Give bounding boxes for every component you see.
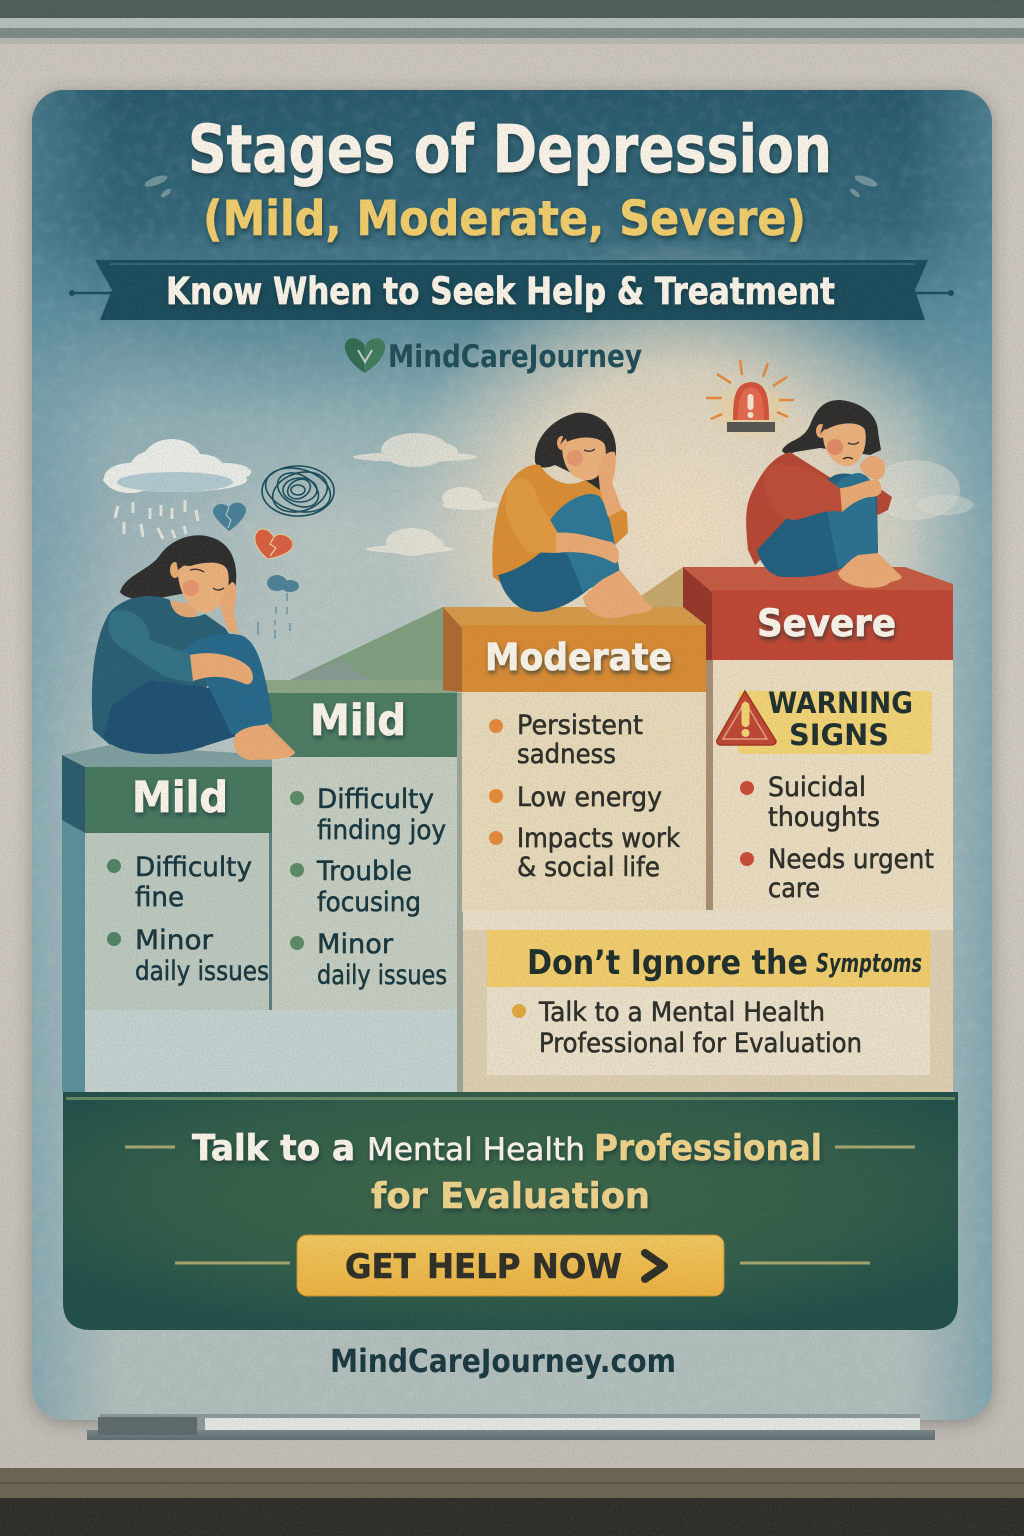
stage column: mild lower [62, 745, 463, 1092]
callout: don't ignore the symptoms: Don’t Ignore the [527, 943, 808, 983]
stage column: moderate: Low energy [517, 782, 662, 813]
stage column: mild lower: Mild [132, 773, 228, 823]
title: Stages of Depression [188, 111, 832, 188]
call-to-action panel [63, 1092, 958, 1330]
step slopes [290, 567, 683, 680]
callout: don't ignore the symptoms [463, 910, 953, 1092]
figure: mild woman [92, 535, 295, 760]
stage column: severe: thoughts [768, 802, 880, 833]
stage column: moderate: Persistent [517, 710, 643, 741]
stage column: mild lower: fine [135, 882, 184, 913]
figure: moderate woman [492, 413, 652, 618]
stage column: moderate: & social life [517, 852, 660, 883]
figure: severe woman [746, 400, 902, 588]
stage column: mild upper: daily issues [317, 960, 447, 991]
icon: tangled thought scribble [261, 461, 335, 519]
stage column: severe: Suicidal [768, 772, 866, 803]
warning signs label: WARNING [768, 686, 913, 720]
warning signs label [717, 686, 932, 754]
stage column: mild upper: finding joy [317, 815, 446, 846]
website url: MindCareJourney.com [330, 1342, 676, 1380]
stage column: mild lower: Difficulty [135, 852, 252, 883]
call-to-action heading [192, 1128, 822, 1217]
button: get help now: GET HELP NOW [345, 1247, 622, 1287]
stage column: mild lower: daily issues [135, 956, 269, 987]
logo: MindCareJourney [388, 339, 642, 375]
stage column: moderate: Impacts work [517, 823, 680, 854]
stage column: severe: Severe [757, 602, 896, 645]
warning signs label: SIGNS [789, 718, 889, 752]
icon: broken blue heart [213, 503, 246, 531]
stage column: mild upper: Trouble [316, 856, 412, 887]
call-to-action heading: Professional [594, 1128, 822, 1169]
stage column: moderate: sadness [517, 739, 616, 770]
callout: don't ignore the symptoms: Talk to a Mental Health [538, 997, 825, 1028]
call-to-action heading: for Evaluation [371, 1176, 650, 1217]
stage column: moderate [443, 607, 708, 912]
button: get help now [297, 1235, 724, 1296]
icon: broken red heart [255, 529, 293, 559]
icon: heart logo [345, 338, 385, 373]
storm cloud with rain [103, 439, 251, 539]
callout: don't ignore the symptoms: Symptoms [816, 949, 922, 979]
background clouds [353, 433, 973, 556]
stage column: mild upper [265, 680, 463, 1093]
call-to-action heading: Mental Health [367, 1132, 585, 1168]
ribbon banner: Know When to Seek Help & Treatment [166, 270, 835, 313]
stage column: mild upper: Minor [317, 929, 394, 960]
icon: small rain cloud [258, 575, 299, 639]
whiteboard tray and marker [87, 1414, 935, 1440]
stage column: mild upper: Difficulty [317, 784, 434, 815]
stage column: mild lower: Minor [135, 925, 214, 956]
ribbon banner [69, 260, 954, 320]
stage column: mild upper: Mild [310, 696, 406, 746]
stage column: severe [683, 567, 953, 930]
call-to-action heading: Talk to a [192, 1128, 355, 1169]
callout: don't ignore the symptoms: Professional for Evaluation [539, 1028, 862, 1059]
stage column: severe: Needs urgent [768, 844, 934, 875]
alarm siren [706, 360, 794, 434]
icon: warning triangle [717, 691, 776, 745]
stage column: mild upper: focusing [317, 887, 421, 918]
subtitle: (Mild, Moderate, Severe) [203, 191, 806, 247]
stage column: severe: care [768, 873, 820, 904]
stage column: moderate: Moderate [485, 636, 672, 679]
title decorations [143, 173, 879, 199]
